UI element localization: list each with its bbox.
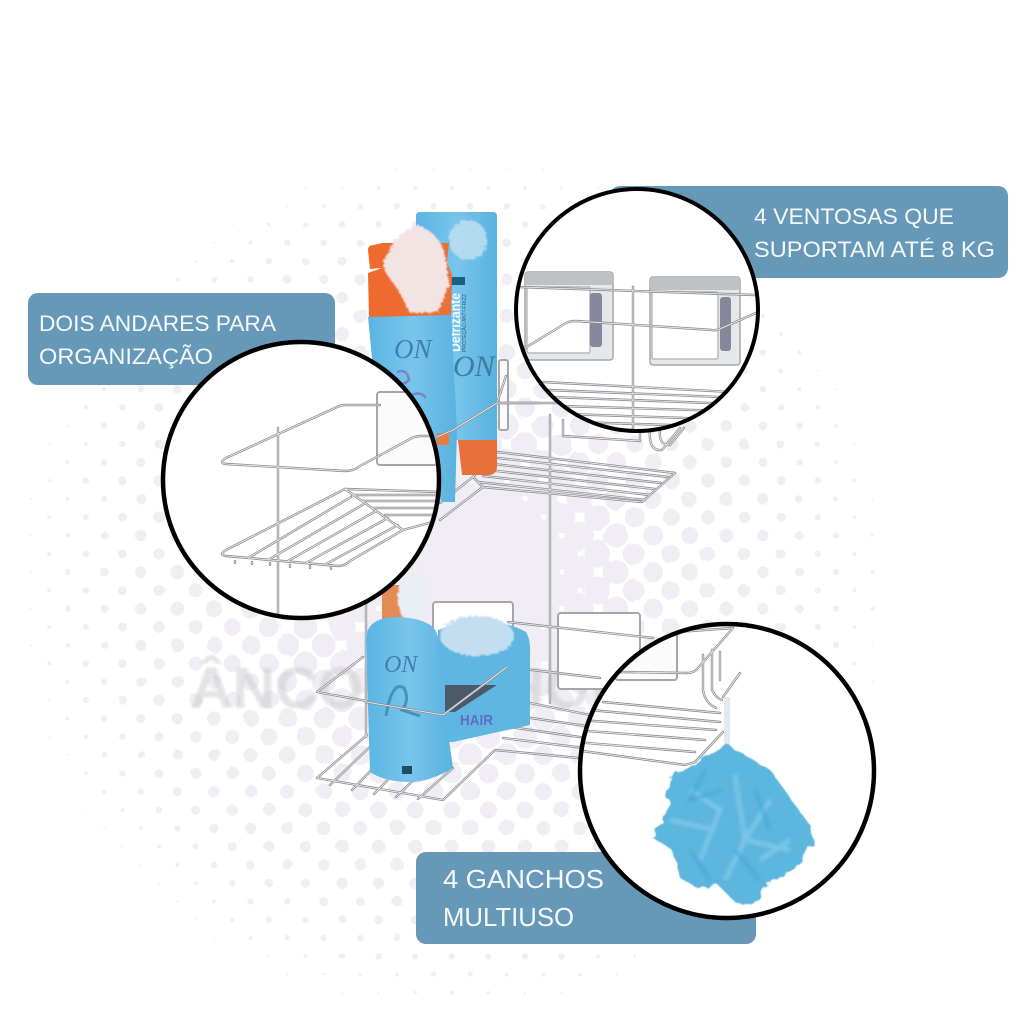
front bottle: orange top xyxy=(368,225,457,502)
label: ganchos background xyxy=(416,852,756,944)
upper bottles xyxy=(368,212,540,502)
upper suction plate xyxy=(377,360,508,465)
lower bottle and jar xyxy=(366,570,530,782)
text: ventosas: 4 VENTOSAS QUE xyxy=(754,204,954,229)
zoom circle: ventosas xyxy=(516,189,758,432)
back tube: defrizante: Defrizante xyxy=(447,293,463,352)
zoom circle: ganchos xyxy=(575,600,874,918)
text: ventosas: SUPORTAM ATÉ 8 KG xyxy=(754,237,995,262)
watermark: ÂNCORA SHOP xyxy=(190,656,630,721)
text: ganchos: MULTIUSO xyxy=(443,902,574,932)
jar: hair xyxy=(438,616,530,742)
wires shadow xyxy=(317,376,684,800)
plate xyxy=(615,634,678,681)
bottle: orange tube with foam xyxy=(382,570,428,627)
wires highlight xyxy=(575,628,740,765)
suction plate xyxy=(377,392,437,465)
wires shadow xyxy=(575,628,740,765)
infographic canvas xyxy=(28,168,1008,995)
loofah sponge xyxy=(653,745,813,905)
back tube: defrizante xyxy=(416,212,497,475)
text: dois andares: ORGANIZAÇÃO xyxy=(39,344,213,369)
wire basket highlight xyxy=(222,405,440,619)
label: ventosas background xyxy=(610,186,1008,278)
text: ventosas xyxy=(754,204,995,262)
label: dois andares background xyxy=(28,293,335,385)
loofah cord xyxy=(724,697,730,748)
front bottle: orange top: ON xyxy=(394,334,433,364)
rails shadow xyxy=(518,287,756,432)
bottle: blue body: ON xyxy=(384,652,419,678)
wire basket shadow xyxy=(222,405,440,619)
text: ganchos xyxy=(443,864,604,932)
front rail over bottle xyxy=(366,667,507,715)
lower suction plates xyxy=(433,602,640,689)
text: dois andares: DOIS ANDARES PARA xyxy=(39,311,276,336)
rails highlight xyxy=(518,287,756,432)
back tube: defrizante: ON xyxy=(453,350,497,383)
back tube: defrizante: PROTEÇÃO ANTI-FRIZZ xyxy=(461,293,468,352)
halftone dot background xyxy=(20,160,890,1010)
wires highlight xyxy=(317,376,684,800)
zoom circle: dois andares xyxy=(163,342,440,619)
shelf product: chrome wire frame xyxy=(317,360,684,800)
jar: hair: HAIR xyxy=(460,712,493,729)
text: dois andares xyxy=(39,311,276,369)
bottle: blue body xyxy=(366,617,453,782)
front rail over bottles xyxy=(437,403,540,437)
text: ganchos: 4 GANCHOS xyxy=(443,864,604,894)
suction plates xyxy=(525,272,740,365)
